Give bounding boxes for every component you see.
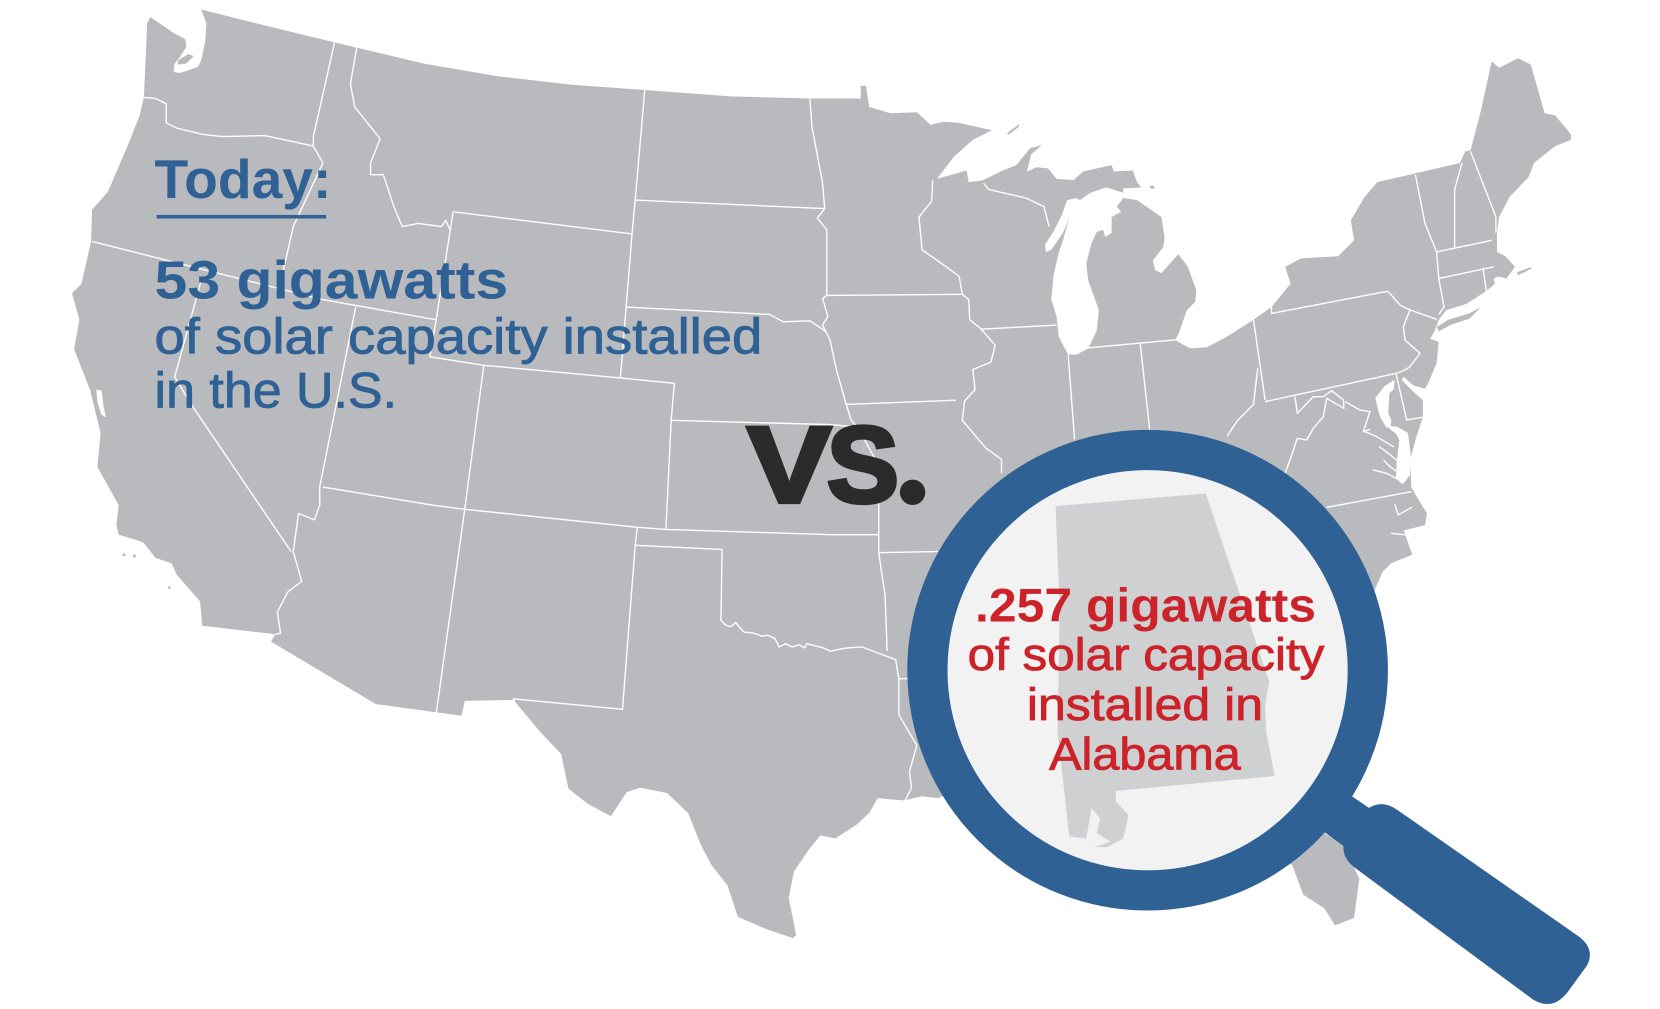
magnifying glass <box>927 450 1590 1004</box>
stat: .257 gigawatts: .257 gigawatts <box>975 579 1316 632</box>
bays: San Francisco and Chesapeake <box>96 381 1418 535</box>
description line two: in the U.S. <box>155 363 397 419</box>
letter S: S <box>827 404 899 525</box>
Long Island and small islands <box>122 54 1532 589</box>
period: . <box>907 460 919 507</box>
heading underline <box>157 215 326 219</box>
description line one: of solar capacity installed <box>155 309 762 365</box>
magnifier ring and lens <box>927 450 1368 890</box>
stat: 53 gigawatts: 53 gigawatts <box>155 251 508 311</box>
magnifier handle <box>1324 796 1590 1004</box>
state borders <box>92 42 1496 800</box>
text block: Alabama figure <box>968 579 1325 780</box>
period <box>900 460 925 507</box>
description line three: Alabama <box>1049 729 1241 780</box>
text block: national figure <box>155 148 762 419</box>
description line one: of solar capacity <box>968 629 1325 680</box>
state silhouette: Alabama <box>1055 493 1275 847</box>
heading: Today: Today: <box>155 148 331 210</box>
description line two: installed in <box>1027 679 1263 730</box>
versus label <box>747 404 925 525</box>
letter V: V <box>747 404 831 525</box>
